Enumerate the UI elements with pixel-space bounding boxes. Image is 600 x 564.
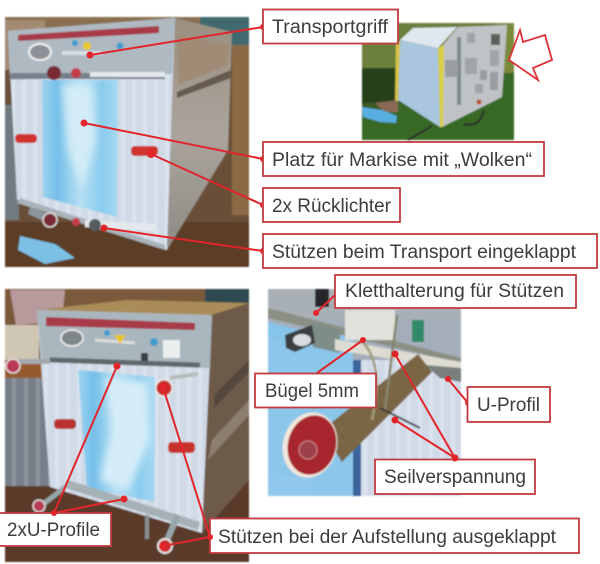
callout: Seilverspannung: Seilverspannung <box>384 467 526 488</box>
photo: trailer rear with supports unfolded <box>5 289 249 562</box>
callout: Stützen beim Transport eingeklappt: Stützen beim Transport eingeklappt <box>272 242 577 263</box>
callout: Stützen bei der Aufstellung ausgeklappt: Stützen bei der Aufstellung ausgeklappt <box>218 527 557 548</box>
callout: Stützen bei der Aufstellung ausgeklappt <box>160 384 579 553</box>
callout: Transportgriff: Transportgriff <box>272 17 389 38</box>
callout: Seilverspannung <box>375 350 535 494</box>
callout: Transportgriff <box>86 10 398 58</box>
callout: Rücklichter: 2x Rücklichter <box>272 196 392 217</box>
callout: U-Profil <box>445 376 550 422</box>
callout: 2xU-Profile <box>0 362 128 546</box>
callout: 2xU-Profile: 2xU-Profile <box>7 520 100 541</box>
callout: Bügel 5mm: Bügel 5mm <box>265 381 359 402</box>
callout: U-Profil: U-Profil <box>477 395 540 416</box>
callout: Rücklichter <box>147 150 400 222</box>
callout: Kletthalterung für Stützen <box>313 275 576 316</box>
icon: red outline arrow <box>509 30 552 80</box>
photo: trailer rear in transport mode <box>5 17 249 267</box>
photo: detail of folded-out support <box>268 289 461 496</box>
photo: trailer on lawn <box>362 23 514 140</box>
callout: Platz für Markise: Platz für Markise mit „Wolken“ <box>272 150 532 171</box>
callout: Bügel 5mm <box>255 337 376 408</box>
callout: Stützen beim Transport eingeklappt <box>100 224 597 268</box>
callout: Platz für Markise <box>80 120 544 176</box>
callout: Kletthalterung für Stützen: Kletthalterung für Stützen <box>345 281 564 302</box>
